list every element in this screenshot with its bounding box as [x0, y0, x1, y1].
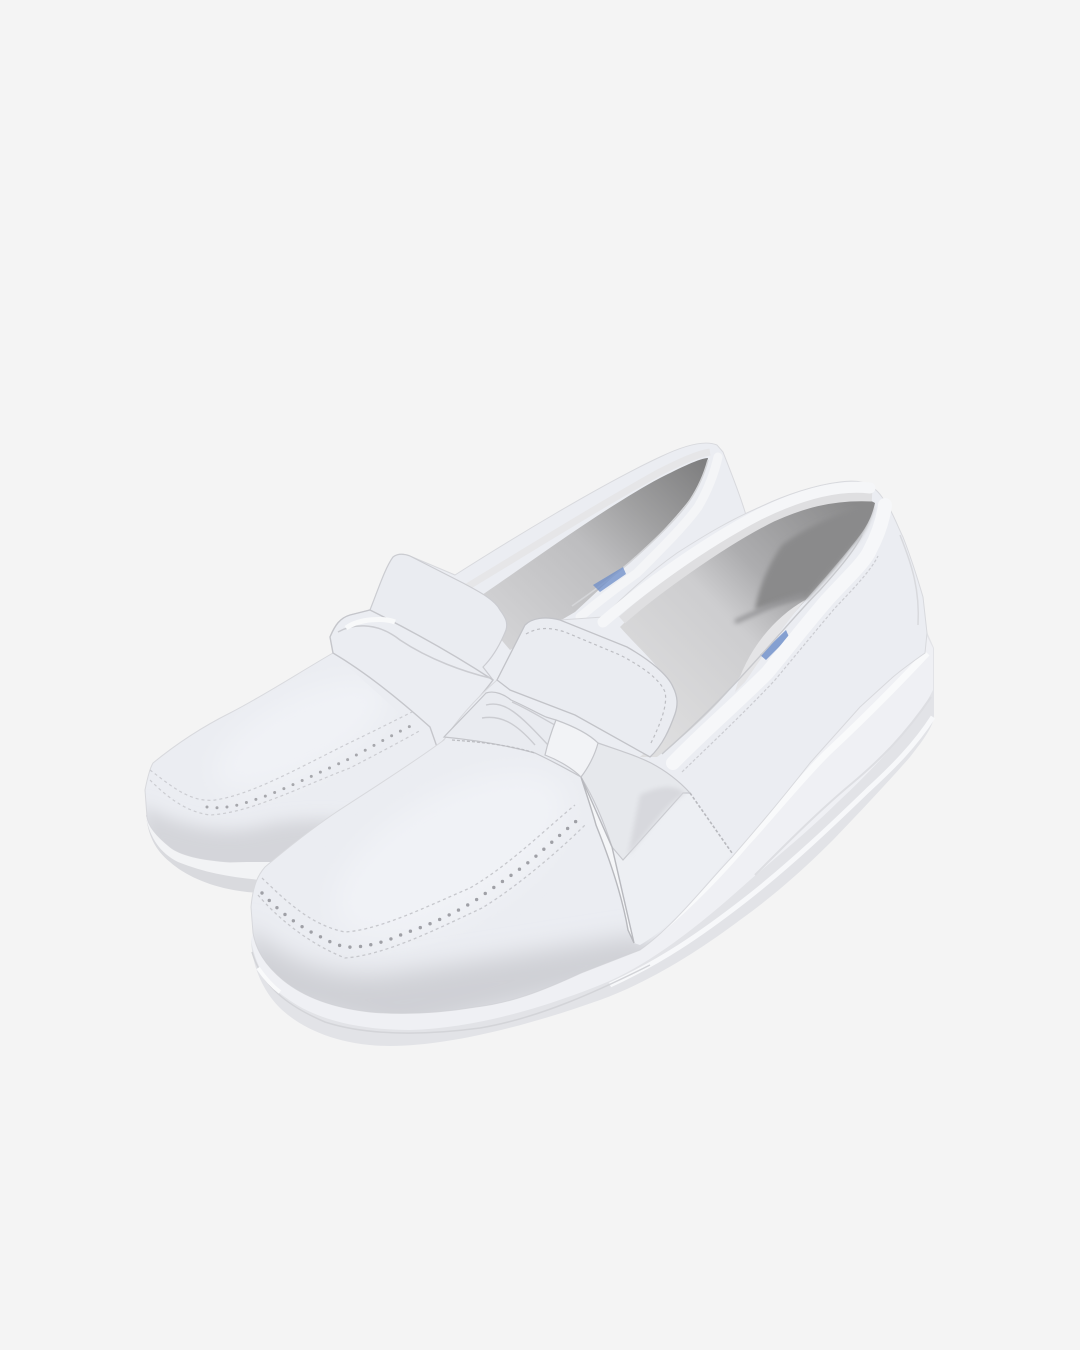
- front shoe heel counter seam: [900, 535, 918, 625]
- back shoe tongue: [370, 554, 507, 680]
- bow knot: [545, 720, 598, 777]
- toe outsole nick: [258, 968, 280, 992]
- front shoe tongue: [497, 618, 677, 757]
- back shoe strap and twist: [330, 610, 493, 747]
- bow right wing: [581, 743, 690, 860]
- front shoe blue insole logo: [760, 630, 789, 660]
- bow tail fold: [581, 777, 634, 943]
- front shoe strap seam: [690, 793, 732, 853]
- bow left wing: [444, 692, 581, 777]
- back shoe sole: [146, 640, 600, 893]
- back shoe collar piping: [580, 457, 718, 617]
- front shoe toe shading: [254, 930, 654, 1013]
- front shoe heel insole curve: [735, 600, 805, 692]
- front shoe strap side panel: [612, 793, 732, 945]
- front shoe midsole and wedge: [251, 632, 933, 1030]
- front shoe: [245, 481, 934, 1046]
- front shoe dark heel patch: [755, 506, 873, 610]
- front shoe outsole: [251, 632, 934, 1046]
- front shoe collar piping: [673, 505, 885, 763]
- back shoe: [140, 443, 750, 893]
- product photo: pair of white loafers: [144, 442, 934, 1046]
- front shoe collar rim: [603, 487, 870, 622]
- front shoe lining and insole: [620, 497, 875, 757]
- back shoe upper: [145, 443, 750, 862]
- front shoe lining top band: [622, 497, 872, 620]
- front shoe bow: [444, 692, 690, 943]
- front shoe wedge ribs: [660, 653, 927, 930]
- back shoe perforated brogue stitching: [150, 712, 421, 815]
- back shoe blue insole logo: [593, 567, 626, 592]
- back shoe toe shading: [147, 808, 328, 862]
- back shoe lining: [470, 458, 708, 650]
- front shoe perforated brogue stitching: [258, 805, 585, 958]
- front shoe upper: [251, 481, 927, 1013]
